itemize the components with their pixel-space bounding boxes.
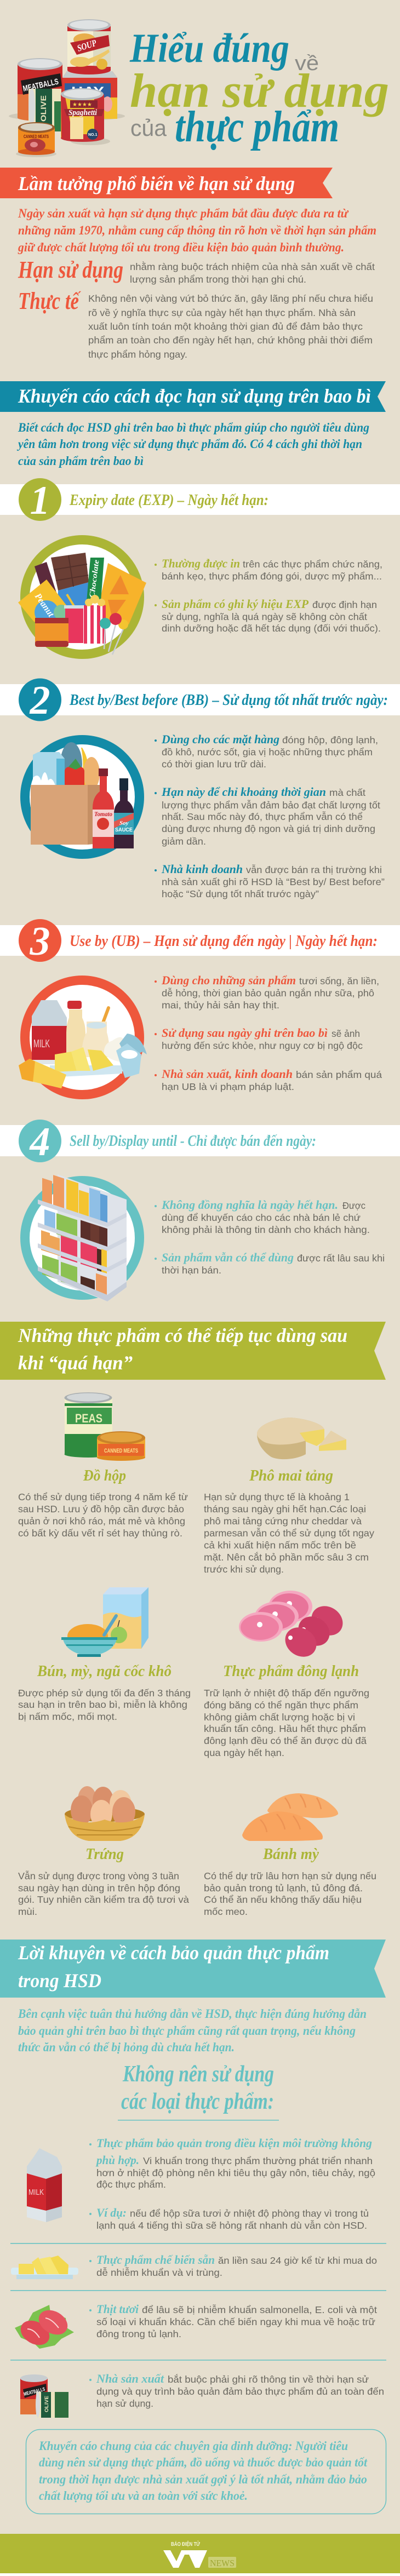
bullet: processed food: ăn liền sau 24 giờ kể từ khi mua do <box>218 2255 377 2266</box>
panel: block cheese: mặt. Nên cắt bỏ phần mốc sâu 3 cm <box>204 1551 369 1563</box>
tin box: HAY <box>71 84 104 98</box>
panel: canned food: Có thể sử dụng tiếp trong 4 năm kể từ <box>18 1491 188 1502</box>
panel: frozen food: đông lạnh đều có thể ăn được dù đã <box>204 1735 367 1746</box>
panel: canned food: quản ở nơi khô ráo, mát mẻ và không <box>18 1516 185 1527</box>
panel: bread: Có thể ăn nếu không thấy dấu hiệu <box>204 1894 362 1905</box>
panel: eggs: mùi. <box>18 1906 37 1917</box>
section 2 bullets: lượng thực phẩm vẫn đảm bảo đạt chất lượng tốt <box>162 799 380 811</box>
panel: frozen food: qua ngày hết hạn. <box>204 1747 284 1758</box>
footer: VTV News logo <box>0 2534 400 2576</box>
meatballs can <box>18 58 62 121</box>
definition: thực tế: Thực tế <box>18 288 81 314</box>
panel: noodles and cereals: Bún, mỳ, ngũ cốc khô <box>37 1663 172 1680</box>
icon: canned peas: CANNED MEATS <box>104 1448 138 1454</box>
icon: fresh meat on leaves <box>15 2305 74 2350</box>
definition: thực tế <box>18 288 373 360</box>
section 2 heading: best before <box>0 678 400 723</box>
section 2 bullets: đóng hộp, đông lạnh, <box>282 735 378 745</box>
icon: milk carton: MILK <box>28 2188 44 2197</box>
section 1 bullets: dinh dưỡng hoặc đã hết tác dụng (đối với thuốc). <box>162 623 381 634</box>
section 4 heading: sell by <box>0 1120 400 1164</box>
banner: storage advice <box>0 1940 386 1998</box>
section 1 bullets <box>155 556 382 634</box>
bullet: processed food: Thực phẩm chế biến sẵn <box>96 2253 215 2267</box>
spaghetti can <box>61 88 104 142</box>
panel: canned food: sau HSD. Lưu ý đồ hộp cần được bảo <box>18 1504 184 1514</box>
definition: thực tế: xuất luôn tính toán một khoảng thời gian đủ để đảm bảo thực <box>88 321 363 332</box>
panel: frozen food: Trữ lạnh ở nhiệt độ thấp đến ngưỡng <box>204 1688 369 1699</box>
section 1 bullets: sử dụng, nghĩa là quá ngày sẽ không còn chất <box>162 611 367 622</box>
section 4 heading: sell by: Sell by/Display until - Chỉ được bán đến ngày: <box>70 1133 316 1150</box>
illustration: grocery bag <box>25 739 139 854</box>
section 3 bullets <box>155 973 382 1092</box>
callout: expert recommendation: trong thời hạn được nhà sản xuất gợi ý là tốt nhất, nhằm đảo bảo <box>39 2472 367 2486</box>
bullet: fresh meat: Thịt tươi <box>96 2302 139 2316</box>
section 2 heading: best before: 2 <box>30 678 50 723</box>
title: Hiểu đúng <box>129 26 289 71</box>
subheading: do not use: Không nên sử dụng <box>122 2062 274 2087</box>
icon: small cans <box>20 2374 68 2418</box>
olive can: OLIVE <box>39 95 48 122</box>
intro text red: Ngày sản xuất và hạn sử dụng thực phẩm bắt đầu được đưa ra từ <box>18 206 349 220</box>
intro text blue: yên tâm hơn trong việc sử dụng thực phẩm đó. Có 4 cách ghi thời hạn <box>16 437 362 451</box>
title: thực phẩm <box>175 103 339 151</box>
section 1 heading: expiry date: Expiry date (EXP) – Ngày hết hạn: <box>69 492 268 509</box>
section 3 bullets: Nhà sản xuất, kinh doanh <box>161 1067 293 1081</box>
icon: small cans: MEATBALLS <box>23 2386 45 2397</box>
panel: eggs <box>18 1786 189 1917</box>
bullet: manufacturer: dụng và quy trình bảo quản đảm bảo thực phẩm đủ an toàn đến <box>96 2386 384 2397</box>
definition: thực tế: Không nên vội vàng vứt bỏ thức ăn, gây lãng phí nếu chưa hiểu <box>88 293 373 304</box>
banner: common misconception <box>0 168 333 198</box>
illustration: stack of food cans <box>9 19 125 157</box>
section 2 bullets: nhất. Sau mốc này đó, thực phẩm vẫn có thể <box>162 811 363 822</box>
banner: storage advice: trong HSD <box>18 1970 101 1992</box>
icon: frozen meat <box>239 1591 348 1663</box>
bullet: example: lạnh quá 4 tiếng thì sữa sẽ hỏng rất nhanh dù vẫn còn HSD. <box>96 2219 367 2231</box>
panel: block cheese: cả khi xuất hiện nấm mốc trên bề <box>204 1540 356 1551</box>
bullet: fresh meat: đông trong tủ lạnh. <box>96 2328 181 2339</box>
icon: butter on tray <box>11 2256 78 2279</box>
icon: cheese wheel <box>257 1418 346 1459</box>
panel: eggs: Vẫn sử dụng được trong vòng 3 tuần <box>18 1870 179 1881</box>
definition: hạn sử dụng <box>18 256 375 285</box>
panel: canned food: Đồ hộp <box>83 1467 126 1484</box>
canned meats can: CANNED MEATS <box>24 134 49 139</box>
panel: frozen food <box>204 1591 369 1758</box>
bullet: example: Ví dụ: <box>96 2206 127 2219</box>
banner: how to read labels <box>0 381 386 412</box>
bullet: fresh meat: số loại vi khuẩn khác. Cần chế biến ngay khi mua về hoặc trữ <box>96 2316 375 2327</box>
section 4 bullets: dùng để khuyến cáo cho các nhà bán lẻ chứ <box>162 1212 361 1223</box>
illustration: dairy products: MILK <box>33 1038 50 1050</box>
intro text teal: bảo quản ghi trên bao bì thực phẩm cũng rất quan trọng, nếu không <box>18 2024 356 2038</box>
section 3 bullets: Dùng cho những sản phẩm <box>161 973 296 987</box>
section 3 heading: use by: 3 <box>30 919 50 964</box>
section 1 bullets: trên các thực phẩm chức năng, <box>243 559 382 570</box>
panel: canned food: có bất kỳ dấu vết rỉ sét hay thủng rò. <box>18 1528 182 1539</box>
definition: hạn sử dụng: Hạn sử dụng <box>18 256 123 283</box>
definition: hạn sử dụng: nhằm ràng buộc trách nhiệm của nhà sản xuất về chất <box>130 261 375 272</box>
section 1 heading: expiry date: 1 <box>30 478 50 523</box>
panel: block cheese <box>204 1418 374 1575</box>
soup can <box>67 19 111 74</box>
illustration: snacks and sweets: Peanut <box>32 591 57 619</box>
definition: thực tế: rõ về ý nghĩa thực sự của ngày hết hạn thực phẩm. Nhà sản <box>88 307 356 318</box>
section 4 bullets: Không đồng nghĩa là ngày hết hạn. <box>161 1198 338 1212</box>
tin box <box>62 71 117 119</box>
callout: expert recommendation: dùng nên sử dụng thực phẩm, đồ uống và thuốc được bảo quản tốt <box>39 2455 368 2469</box>
section 3 heading: use by <box>0 919 400 964</box>
section 2 bullets: mà chất <box>329 787 365 798</box>
section 3 bullets: sẽ ảnh <box>332 1028 360 1039</box>
section 2 bullets: hoặc “Sử dụng tốt nhất trước ngày” <box>162 888 319 899</box>
section 4 heading: sell by: 4 <box>28 1120 50 1164</box>
panel: bread: Bánh mỳ <box>262 1846 319 1863</box>
section 2 bullets: giảm dần. <box>162 836 206 847</box>
panel: canned food <box>18 1392 188 1539</box>
canned meats can <box>18 122 55 155</box>
illustration: supermarket shelf <box>25 1171 139 1301</box>
section 2 bullets: đồ khô, nước sốt, gia vị hoặc những thực phẩm <box>162 747 373 758</box>
panel: eggs: gói. Tuy nhiên cần kiểm tra độ tươi và <box>18 1894 189 1905</box>
intro text teal: thức ăn vẫn có thể bị hỏng dù chưa hết hạn. <box>18 2040 235 2054</box>
panel: bread <box>204 1793 376 1917</box>
icon: bread loaves <box>242 1793 338 1841</box>
banner: foods usable after expiry <box>0 1322 386 1380</box>
title: hạn sử dụng <box>130 65 389 118</box>
section 4 bullets: không phải là thông tin dành cho khách hàng. <box>162 1224 370 1235</box>
bullet: processed food: dễ nhiễm khuẩn và vi trùng. <box>96 2267 222 2278</box>
icon: small cans: OLIVE <box>44 2396 49 2412</box>
spaghetti can: NO.1 <box>88 133 97 137</box>
panel: block cheese: parmesan vẫn có thể sử dụng tốt ngay <box>204 1527 374 1539</box>
section 2 bullets: có thời gian lưu trữ dài. <box>162 759 266 770</box>
illustration: grocery bag: Soy <box>119 820 129 827</box>
section 1 bullets: Sản phẩm có ghi ký hiệu EXP <box>162 597 309 611</box>
banner: common misconception: Lầm tưởng phổ biến về hạn sử dụng <box>18 173 295 194</box>
title: về <box>295 52 319 75</box>
section 1 heading: expiry date <box>0 478 400 523</box>
bullet: unsuitable storage: Vi khuẩn trong thực phẩm thường phát triển nhanh <box>143 2155 373 2166</box>
spaghetti can: Spaghetti <box>68 108 98 117</box>
icon: basket of eggs <box>65 1786 145 1841</box>
icon: canned peas <box>65 1392 145 1461</box>
panel: noodles and cereals <box>18 1587 191 1722</box>
section 2 bullets: nhà sản xuất ghi rõ HSD là “Best by/ Best before” <box>162 876 385 887</box>
icon: cereal box and bowl <box>61 1587 148 1657</box>
subheading: do not use <box>118 2062 279 2121</box>
illustration: grocery bag: SAUCE <box>115 827 133 833</box>
definition: hạn sử dụng: lượng sản phẩm trong thời hạn ghi chú. <box>130 274 306 285</box>
intro text teal: Bên cạnh việc tuân thủ hướng dẫn về HSD, thực hiện đúng hướng dẫn <box>18 2007 367 2021</box>
bullet: manufacturer: hạn sử dụng. <box>96 2398 153 2409</box>
illustration: snacks and sweets: Chocolate <box>88 559 101 598</box>
panel: noodles and cereals: sau hạn in trên bao bì, miễn là không <box>18 1699 187 1710</box>
bullet: manufacturer: Nhà sản xuất <box>96 2372 164 2385</box>
bullet: unsuitable storage: Thực phẩm bảo quản trong điều kiện môi trường không <box>96 2136 372 2150</box>
intro text teal <box>18 2007 367 2054</box>
panel: bread: mốc meo. <box>204 1906 248 1917</box>
soup can: SOUP <box>76 37 98 54</box>
section 3 bullets: mai, thủy hải sản hay thịt. <box>162 1000 279 1011</box>
bullet: unsuitable storage: hơn ở nhiệt độ phòng nên khi tiêu thụ gây nôn, tiêu chảy, ngộ <box>96 2167 375 2178</box>
panel: block cheese: phô mai tảng cứng như cheddar và <box>204 1516 362 1527</box>
section 2 bullets: vẫn được bán ra thị trường khi <box>246 864 382 875</box>
panel: frozen food: khuẩn tấn công. Hầu hết thực phẩm <box>204 1723 366 1734</box>
panel: block cheese: tháng sau ngày ghi hết hạn.Các loại <box>204 1504 366 1514</box>
definition: thực tế: thực phẩm hỏng ngay. <box>88 349 187 360</box>
section 1 bullets: Thường được in <box>162 556 240 570</box>
section 2 bullets: dùng được nhưng độ ngon và giá trị dinh dưỡng <box>162 823 375 834</box>
footer: VTV News logo: BÁO ĐIỆN TỬ <box>171 2540 201 2548</box>
section 3 bullets: bán sản phẩm quá <box>296 1069 382 1080</box>
footer: VTV News logo: NEWS <box>210 2558 235 2568</box>
spaghetti can: ★★★★ <box>72 102 92 108</box>
panel: bread: bảo quản trong tủ lạnh, tủ đông đá. <box>204 1883 363 1894</box>
section 1 bullets: được định hạn <box>312 599 377 610</box>
bullet: manufacturer <box>89 2372 384 2409</box>
bullet: unsuitable storage: phù hợp. <box>95 2153 139 2167</box>
section 1 bullets: bánh kẹo, thực phẩm đóng gói, dược mỹ phẩm... <box>162 571 382 582</box>
callout: expert recommendation: Khuyến cáo chung của các chuyên gia dinh dưỡng: Người tiêu <box>38 2439 348 2453</box>
panel: frozen food: không giảm chất lượng hoặc bị vi <box>204 1712 355 1723</box>
panel: frozen food: Thực phẩm đông lạnh <box>223 1663 359 1680</box>
banner: foods usable after expiry: Những thực phẩm có thể tiếp tục dùng sau <box>18 1324 347 1346</box>
section 4 bullets: thời hạn bán. <box>162 1265 221 1276</box>
panel: eggs: Trứng <box>85 1846 124 1863</box>
illustration: dairy products <box>19 980 147 1094</box>
bullet: fresh meat <box>89 2302 377 2339</box>
intro text red: giữ được chất lượng tối ưu trong điều kiện bảo quản bình thường. <box>18 240 344 254</box>
section 4 bullets <box>155 1198 385 1276</box>
illustration: grocery bag: Tomato <box>94 810 112 818</box>
bullet: fresh meat: để lâu sẽ bị nhiễm khuẩn salmonella, E. coli và một <box>142 2304 377 2315</box>
bullet: processed food <box>89 2253 377 2278</box>
bullet: example <box>89 2206 369 2231</box>
illustration: snacks and sweets <box>18 540 146 655</box>
section 3 heading: use by: Use by (UB) – Hạn sử dụng đến ngày | Ngày hết hạn: <box>70 933 378 950</box>
section 4 bullets: được rất lâu sau khi <box>297 1253 385 1264</box>
icon: milk carton <box>27 2148 62 2222</box>
section 3 bullets: Sử dụng sau ngày ghi trên bao bì <box>162 1026 328 1040</box>
intro text blue: Biết cách đọc HSD ghi trên bao bì thực phẩm giúp cho người tiêu dùng <box>18 421 369 434</box>
section 3 bullets: tươi sống, ăn liền, <box>299 976 379 986</box>
section 4 bullets: Được <box>342 1200 365 1211</box>
section 2 bullets: Dùng cho các mặt hàng <box>161 732 279 746</box>
bullet: unsuitable storage: độc thực phẩm. <box>96 2179 166 2190</box>
subheading: do not use: các loại thực phẩm: <box>121 2089 274 2114</box>
section 2 bullets: Hạn này để chỉ khoảng thời gian <box>161 785 326 799</box>
banner: foods usable after expiry: khi “quá hạn” <box>18 1352 133 1374</box>
panel: bread: Có thể dự trữ lâu hơn hạn sử dụng nếu <box>204 1871 376 1881</box>
callout: expert recommendation: chất lượng tối ưu và an toàn với sức khoẻ. <box>39 2489 248 2503</box>
meatballs can: MEATBALLS <box>22 77 59 94</box>
panel: eggs: sau ngày hạn dùng in trên hộp đóng <box>18 1883 180 1894</box>
section 4 bullets: Sản phẩm vẫn có thể dùng <box>162 1250 294 1264</box>
definition: thực tế: phẩm an toàn cho đến ngày hết hạn, chứ không phải thời điểm <box>88 335 373 346</box>
banner: storage advice: Lời khuyên về cách bảo quản thực phẩm <box>18 1942 329 1964</box>
bullet: manufacturer: bắt buộc phải ghi rõ thông tin về thời hạn sử <box>168 2373 369 2385</box>
icon: canned peas: PEAS <box>75 1412 102 1425</box>
panel: noodles and cereals: Được phép sử dụng tối đa đến 3 tháng <box>18 1688 191 1699</box>
section 3 bullets: hạn UB là vi phạm pháp luật. <box>162 1081 294 1092</box>
intro text blue: của sản phẩm trên bao bì <box>18 454 144 468</box>
panel: noodles and cereals: bị nấm mốc, mối mọt. <box>18 1711 117 1722</box>
intro text red: những năm 1970, nhằm cung cấp thông tin rõ hơn về thời hạn sản phẩm <box>18 223 376 237</box>
banner: how to read labels: Khuyến cáo cách đọc hạn sử dụng trên bao bì <box>18 385 371 407</box>
section 2 bullets: Nhà kinh doanh <box>161 862 243 876</box>
panel: frozen food: đóng băng có thể ngăn thực phẩm <box>204 1700 358 1711</box>
callout: expert recommendation <box>26 2430 386 2514</box>
section 3 bullets: hưởng đến sức khỏe, như nguy cơ bị ngộ độc <box>162 1040 363 1051</box>
olive can <box>28 88 61 131</box>
intro text red <box>18 206 376 254</box>
section 3 bullets: dễ hỏng, thời gian bảo quản ngắn như sữa, phô <box>162 987 374 999</box>
panel: block cheese: Hạn sử dụng thực tế là khoảng 1 <box>204 1491 350 1502</box>
panel: block cheese: Phô mai tảng <box>249 1467 333 1484</box>
section 2 bullets <box>155 732 385 899</box>
bullet: example: nếu để hộp sữa tươi ở nhiệt độ phòng thay vì trong tủ <box>130 2208 369 2219</box>
intro text blue <box>16 421 369 468</box>
title: của <box>130 115 167 141</box>
panel: block cheese: trước khi sử dụng. <box>204 1564 284 1575</box>
bullet: unsuitable storage <box>89 2136 375 2190</box>
title <box>129 26 389 151</box>
